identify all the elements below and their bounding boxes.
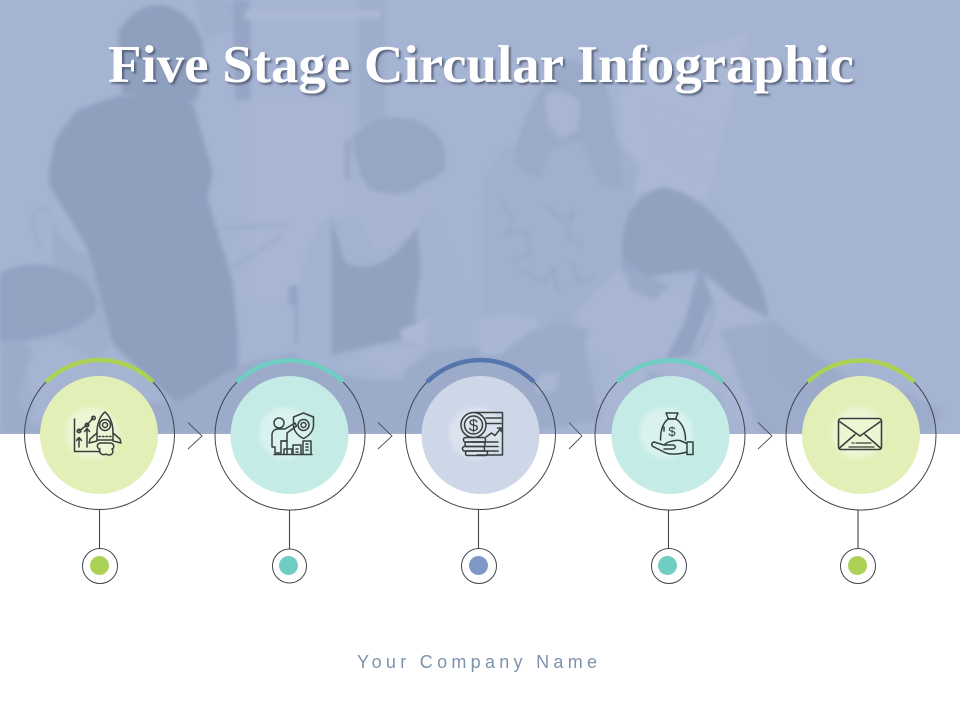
- stage 2: [215, 360, 365, 510]
- stage 3 filled circle: [422, 376, 540, 494]
- back woman hair: [520, 62, 614, 144]
- stage 4 ring: [595, 382, 745, 510]
- back woman dress: [622, 150, 636, 190]
- stage 5 filled circle: [802, 376, 920, 494]
- stage 4 filled circle: [612, 376, 730, 494]
- stage 1 icon glow: [65, 407, 119, 459]
- stage 4 top arc: [617, 360, 723, 382]
- title: Five Stage Circular Infographic: [108, 36, 854, 94]
- stage 5 icon glow: [832, 407, 884, 459]
- stage 3 top arc: [427, 360, 534, 382]
- centre woman arms and body: [300, 215, 472, 360]
- stage 2 ring: [215, 382, 365, 510]
- marker 1: [82, 510, 118, 584]
- stage 2 filled circle: [230, 376, 348, 494]
- stage 1 top arc: [46, 360, 153, 382]
- chair: [288, 284, 298, 345]
- stage 5 top arc: [808, 360, 914, 382]
- right woman shirt: [575, 270, 768, 434]
- whiteboard paper: [620, 32, 748, 200]
- icon: dollar sign on bag: $: [668, 424, 676, 439]
- marker 5: [840, 510, 876, 584]
- icon: hand holding money bag: [652, 413, 693, 454]
- stage 3 icon glow: [449, 407, 503, 459]
- marker 4: [652, 510, 686, 584]
- wall details: [233, 0, 250, 100]
- stage 4: [595, 360, 745, 510]
- arrow 2: [378, 422, 392, 449]
- stage 1: [25, 360, 174, 510]
- stage 5 ring: [786, 382, 936, 510]
- stage 1 ring: [25, 382, 174, 510]
- right woman hair: [622, 187, 768, 318]
- arrow 1: [188, 422, 202, 449]
- table and lower arms: [299, 364, 402, 432]
- standing man: [48, 95, 240, 405]
- stage 4 icon glow: [639, 407, 693, 459]
- background photo band: [0, 0, 960, 434]
- stage 3 ring: [406, 382, 556, 510]
- footer company name: Your Company Name: [357, 652, 597, 672]
- stage 2 top arc: [237, 360, 343, 382]
- stage 2 icon glow: [259, 407, 311, 459]
- icon: coins and report: [461, 412, 502, 456]
- arrow 3: [569, 422, 582, 449]
- left seated head: [0, 264, 96, 342]
- icon: dollar sign on coin: $: [469, 416, 479, 435]
- centre woman hair: [352, 117, 446, 195]
- stage 3: [406, 360, 556, 510]
- arrow 4: [758, 422, 772, 449]
- marker 3: [462, 510, 496, 584]
- marker 2: [272, 510, 306, 583]
- icon: person with shield and bars: [272, 413, 314, 454]
- stage 5: [786, 360, 936, 510]
- icon: rocket and growth chart: [74, 412, 121, 455]
- icon: envelope: [838, 418, 882, 450]
- stage 1 filled circle: [40, 376, 158, 494]
- cable: [34, 209, 288, 268]
